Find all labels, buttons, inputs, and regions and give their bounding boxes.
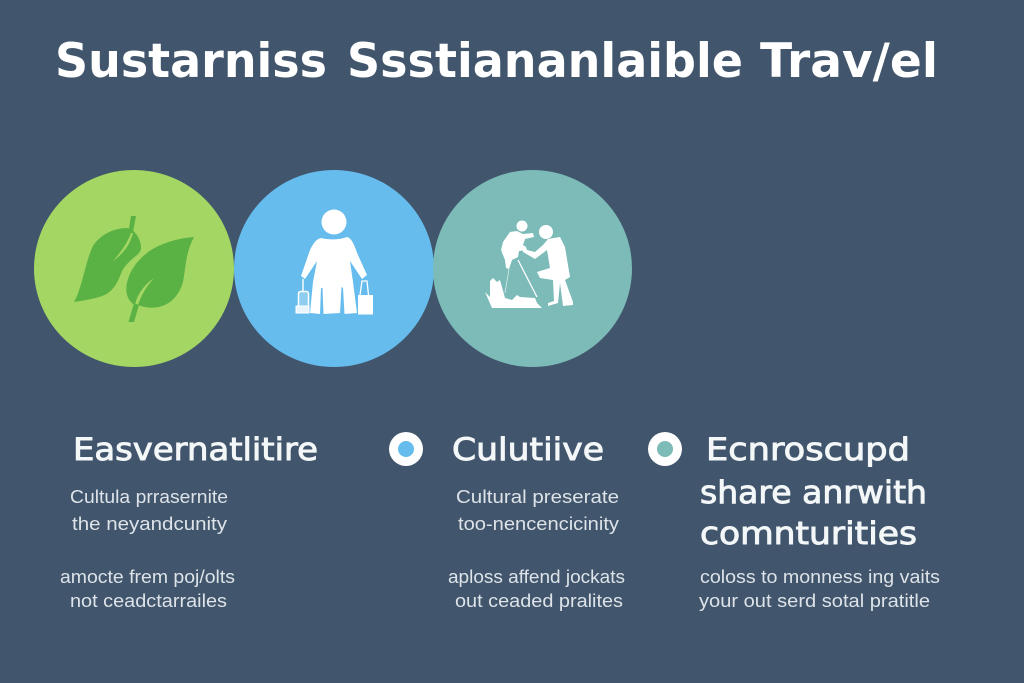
column 2: [448, 432, 625, 611]
heading: column 3: comnturities: [700, 516, 917, 552]
text block: column 1 lower: [60, 567, 235, 611]
text block: column 2 lower: out ceaded pralites: [455, 591, 623, 611]
text block: column 2 lower: [448, 567, 625, 611]
text block: column 1 upper: [70, 487, 228, 534]
text block: column 1 upper: the neyandcunity: [72, 514, 227, 534]
text block: column 1 upper: Cultula prrasernite: [70, 487, 228, 507]
panel: teal community circle: [433, 170, 632, 367]
text block: column 1 lower: not ceadctarrailes: [70, 591, 227, 611]
column 1: [60, 432, 318, 611]
heading: column 1: Easvernatlitire: [73, 432, 318, 468]
icon: adult and child: [485, 220, 573, 308]
title: Ssstiananlaible: [347, 34, 743, 89]
bullet: blue: [389, 432, 423, 466]
icon: traveller with bags: [296, 210, 373, 314]
panel: blue traveller circle: [234, 170, 434, 367]
title: Sustarniss: [55, 34, 327, 89]
column 3: [699, 432, 940, 611]
heading: column 2: Culutiive: [452, 432, 604, 468]
text block: column 3 lower: your out serd sotal pratitle: [699, 591, 930, 611]
heading: column 3: share anrwith: [700, 475, 927, 511]
text block: column 1 lower: amocte frem poj/olts: [60, 567, 235, 587]
text block: column 3 lower: [699, 567, 940, 611]
text block: column 2 lower: aploss affend jockats: [448, 567, 625, 587]
title: Trav/el: [760, 34, 938, 89]
title: [55, 34, 938, 89]
text block: column 2 upper: too-nencencicinity: [458, 514, 619, 534]
text block: column 2 upper: Cultural preserate: [456, 487, 619, 507]
panel: green leaf circle: [34, 170, 234, 367]
heading: column 3: [700, 432, 927, 552]
text block: column 2 upper: [456, 487, 619, 534]
text block: column 3 lower: coloss to monness ing vaits: [700, 567, 940, 587]
icon: leaves: [74, 216, 194, 322]
bullet: teal: [648, 432, 682, 466]
heading: column 3: Ecnroscupd: [706, 432, 910, 468]
